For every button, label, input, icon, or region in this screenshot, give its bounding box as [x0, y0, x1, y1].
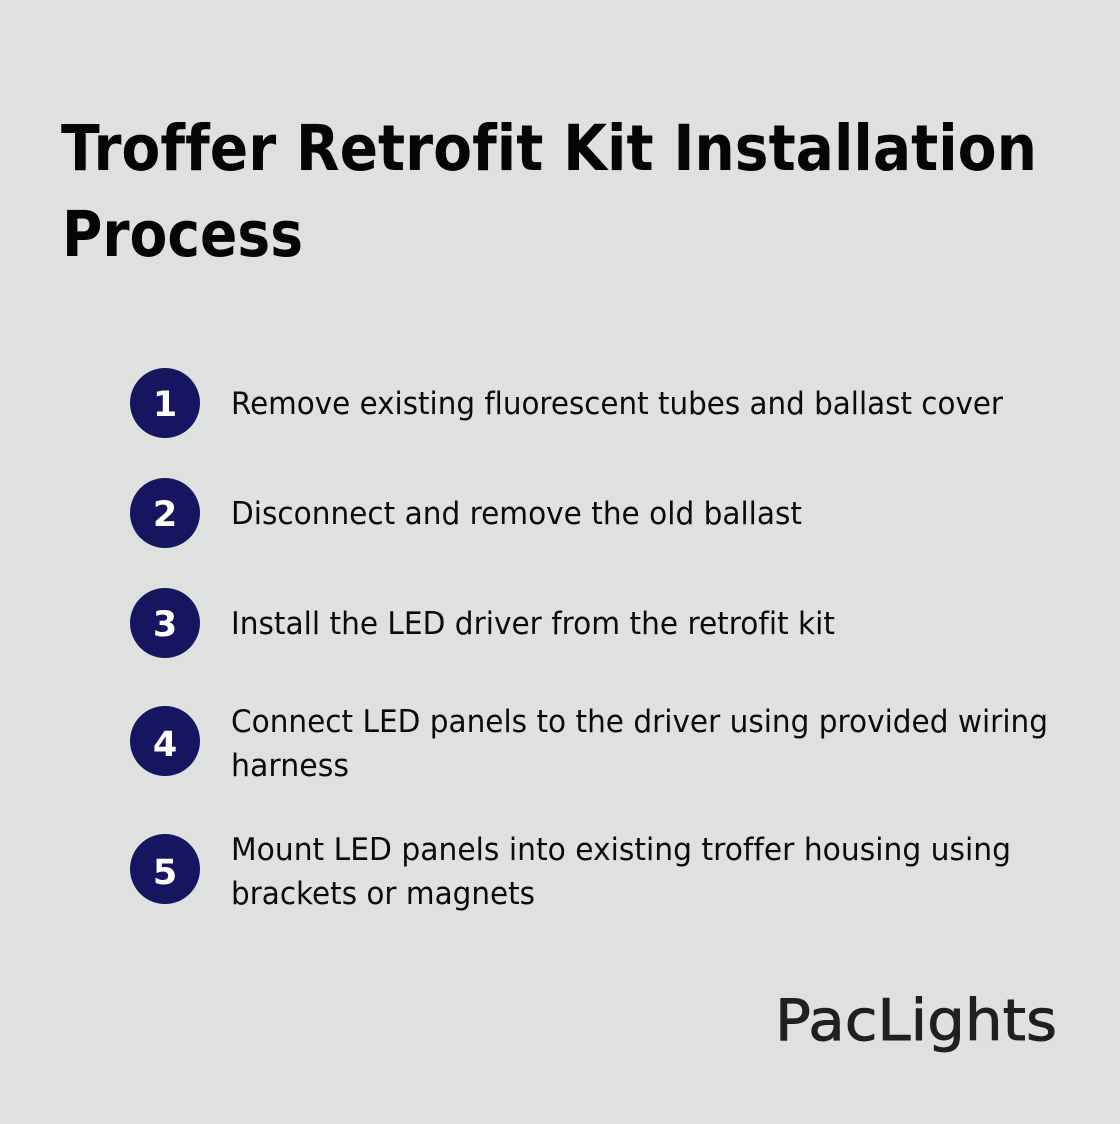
- number badge 5: [130, 834, 200, 904]
- logo: PacLights: PacLights: [775, 988, 1057, 1054]
- number badge 4: 4: [153, 725, 177, 765]
- number badge 2: 2: [153, 495, 177, 535]
- step 1: [130, 368, 1003, 438]
- number badge 4: [130, 706, 200, 776]
- title: [61, 112, 1037, 271]
- step 5: [130, 832, 1011, 912]
- step 5 text: Mount LED panels into existing troffer housing using: [231, 832, 1011, 868]
- step 4 text: Connect LED panels to the driver using provided wiring: [231, 704, 1048, 740]
- step 2 text: Disconnect and remove the old ballast: [231, 496, 802, 532]
- number badge 3: 3: [153, 605, 177, 645]
- step 3: [130, 588, 835, 658]
- title: Troffer Retrofit Kit Installation: [61, 112, 1037, 185]
- number badge 1: 1: [153, 385, 177, 425]
- step 2: [130, 478, 802, 548]
- step 5 text: brackets or magnets: [231, 876, 535, 912]
- title: Process: [62, 198, 303, 271]
- step 1 text: Remove existing fluorescent tubes and ballast cover: [231, 386, 1003, 422]
- step 4: [130, 704, 1048, 784]
- number badge 1: [130, 368, 200, 438]
- step 5 text: [231, 832, 1011, 912]
- number badge 3: [130, 588, 200, 658]
- number badge 2: [130, 478, 200, 548]
- step 3 text: Install the LED driver from the retrofit kit: [231, 606, 835, 642]
- step 4 text: [231, 704, 1048, 784]
- number badge 5: 5: [153, 853, 177, 893]
- step 4 text: harness: [231, 748, 349, 784]
